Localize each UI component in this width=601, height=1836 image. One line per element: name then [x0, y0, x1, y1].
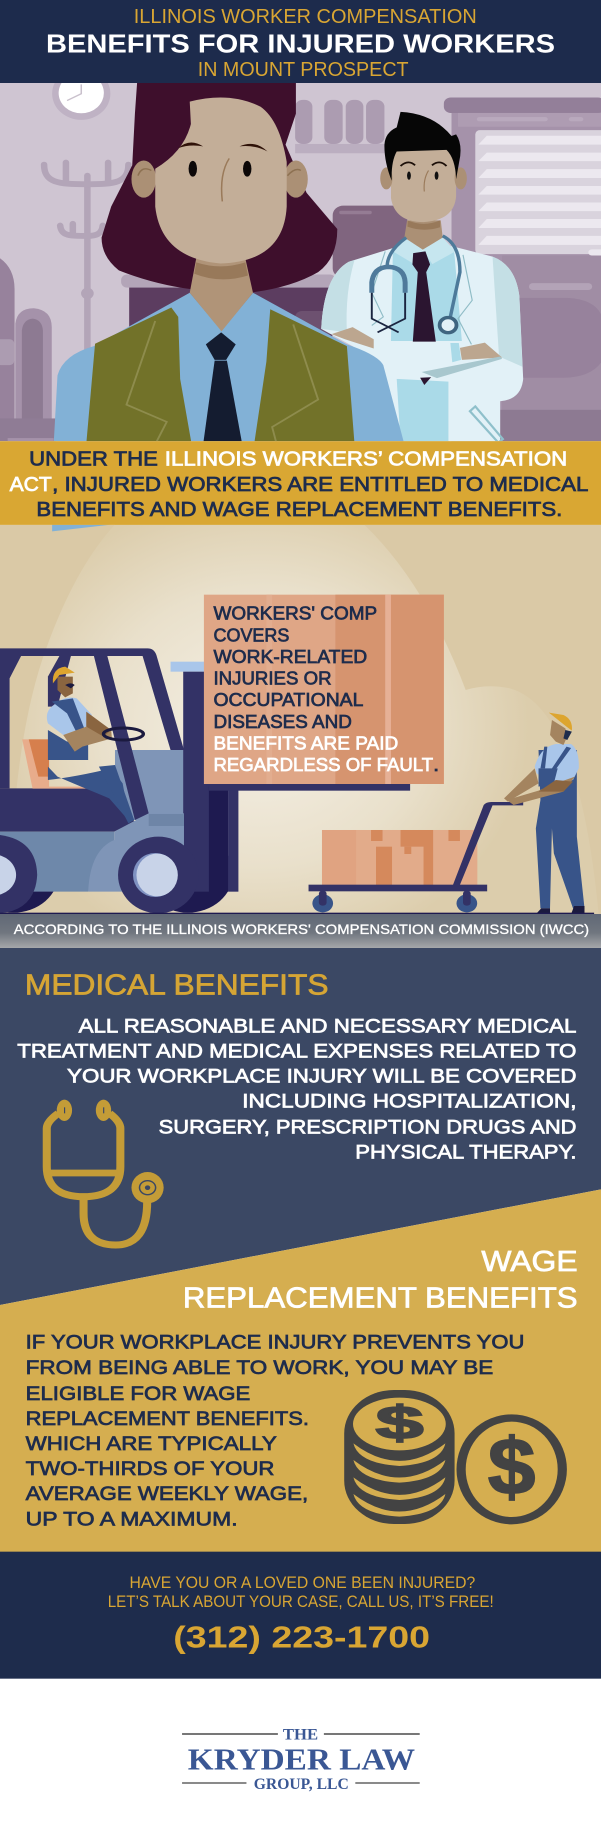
medical text [17, 1016, 577, 1163]
callout text: OCCUPATIONAL [213, 690, 363, 711]
stethoscope on doctor [372, 236, 460, 333]
forklift [0, 648, 238, 913]
logo: Kryder Law Group [182, 1725, 420, 1793]
wage text: ELIGIBLE FOR WAGE [26, 1383, 250, 1405]
gold intro band: ACT [10, 473, 52, 495]
gold intro band: ILLINOIS WORKERS’ COMPENSATION [165, 448, 567, 470]
header line one: ILLINOIS WORKER COMPENSATION [134, 4, 477, 28]
gold intro band: , INJURED WORKERS ARE ENTITLED TO MEDICAL [52, 473, 588, 495]
forklift mast [183, 672, 209, 892]
call to action text: LET’S TALK ABOUT YOUR CASE, CALL US, IT’S FREE! [108, 1592, 494, 1611]
panel: office illustration [0, 68, 601, 444]
callout text: BENEFITS ARE PAID [213, 734, 398, 754]
panel: medical benefits [0, 948, 601, 1305]
shelf with jars [295, 100, 385, 153]
coin stack [344, 1390, 455, 1524]
wage text: AVERAGE WEEKLY WAGE, [26, 1483, 308, 1505]
icon: stethoscope [47, 1100, 164, 1245]
wage text [26, 1332, 524, 1530]
medical text: SURGERY, PRESCRIPTION DRUGS AND [159, 1117, 576, 1138]
wage text: REPLACEMENT BENEFITS. [26, 1408, 309, 1430]
title: BENEFITS FOR INJURED WORKERS [46, 29, 555, 58]
single coin [456, 1414, 567, 1524]
gold intro band: UNDER THE [29, 448, 158, 470]
woman in foreground [54, 81, 404, 444]
medical text: YOUR WORKPLACE INJURY WILL BE COVERED [67, 1066, 576, 1087]
header [0, 0, 601, 83]
single coin: $ [488, 1423, 535, 1512]
callout text: REGARDLESS OF FAULT [213, 755, 433, 776]
worker pushing cart [504, 713, 585, 914]
coin stack: $ [376, 1396, 424, 1449]
callout text: INJURIES OR [213, 669, 332, 689]
medical text: INCLUDING HOSPITALIZATION, [242, 1091, 576, 1112]
callout text: WORK-RELATED [213, 647, 367, 668]
callout text: DISEASES AND [213, 712, 352, 733]
wage text: FROM BEING ABLE TO WORK, YOU MAY BE [26, 1357, 493, 1379]
gold intro band: BENEFITS AND WAGE REPLACEMENT BENEFITS. [36, 498, 562, 521]
header line three: IN MOUNT PROSPECT [198, 57, 409, 81]
wage text: IF YOUR WORKPLACE INJURY PREVENTS YOU [26, 1332, 524, 1353]
background glow dome [17, 525, 522, 912]
wage text: WHICH ARE TYPICALLY [26, 1433, 277, 1455]
heading: wage replacement [183, 1245, 578, 1314]
logo: Kryder Law Group: GROUP, LLC [254, 1775, 349, 1793]
left chairs [0, 258, 56, 443]
heading: medical benefits: MEDICAL BENEFITS [25, 968, 328, 1001]
callout text: COVERS [213, 626, 289, 646]
logo: Kryder Law Group: THE [283, 1725, 318, 1743]
wage text: TWO-THIRDS OF YOUR [26, 1458, 274, 1480]
medical text: ALL REASONABLE AND NECESSARY MEDICAL [79, 1016, 577, 1037]
panel: warehouse illustration [0, 525, 601, 915]
source band [0, 914, 601, 948]
gold intro band [0, 441, 601, 525]
shirt sliver under band [52, 525, 111, 531]
coat rack [44, 163, 128, 351]
heading: wage replacement: WAGE [481, 1245, 578, 1277]
icon: wall clock [52, 83, 110, 120]
callout text: . [433, 755, 439, 776]
medical text: PHYSICAL THERAPY. [355, 1142, 576, 1163]
logo: Kryder Law Group: KRYDER LAW [188, 1743, 415, 1777]
call to action text: HAVE YOU OR A LOVED ONE BEEN INJURED? [130, 1573, 475, 1592]
phone number: (312) 223-1700 [173, 1620, 430, 1655]
cart with boxes [309, 802, 523, 912]
call to action text [108, 1573, 494, 1611]
callout text: WORKERS' COMP [213, 604, 377, 624]
callout text [213, 604, 439, 776]
doctor [321, 112, 523, 443]
icon: coins [344, 1390, 567, 1524]
heading: wage replacement: REPLACEMENT BENEFITS [183, 1281, 578, 1314]
cabinet and window blinds [444, 97, 601, 444]
panel: call to action footer [0, 1552, 601, 1679]
medical text: TREATMENT AND MEDICAL EXPENSES RELATED TO [17, 1041, 576, 1062]
driver [22, 667, 143, 823]
panel: large box callout [204, 595, 444, 791]
panel: wage replacement benefits [0, 1189, 601, 1553]
wage text: UP TO A MAXIMUM. [26, 1509, 238, 1530]
back chair and desk [121, 206, 407, 348]
